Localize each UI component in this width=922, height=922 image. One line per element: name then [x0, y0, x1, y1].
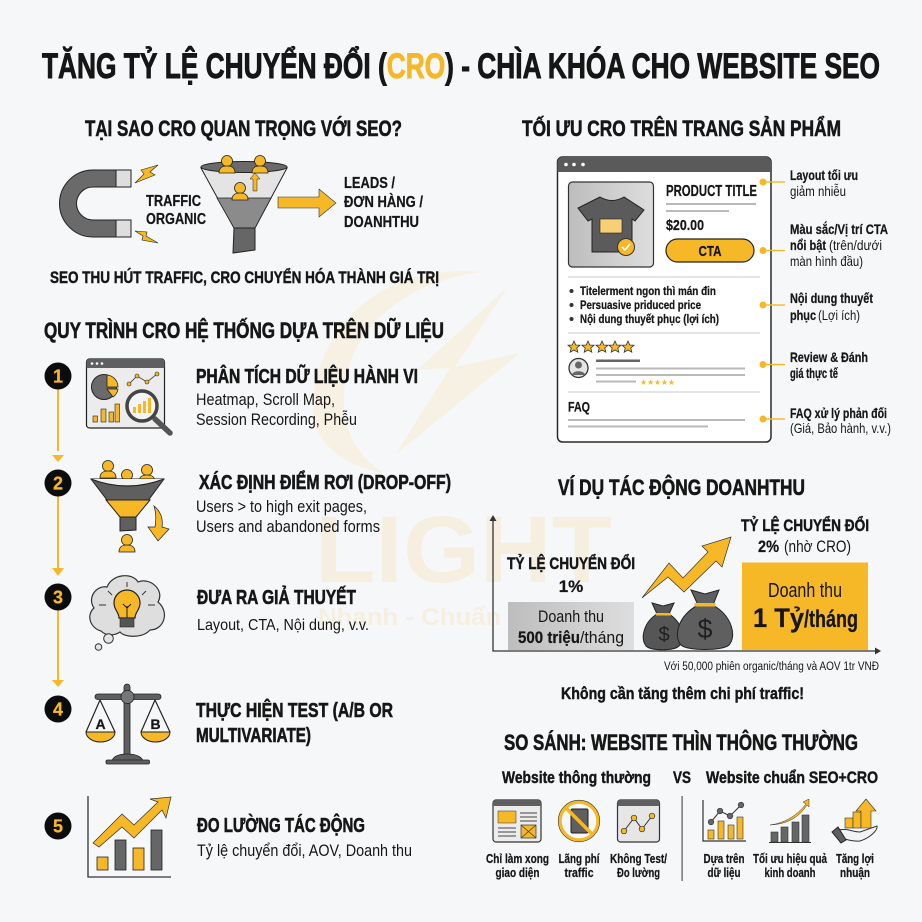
panel: product page mockup: PRODUCT TITLE	[666, 183, 757, 200]
bar: before CRO: Doanh thu	[538, 607, 604, 626]
step 5 number	[44, 812, 72, 840]
label: data driven	[704, 851, 745, 880]
label: no test: Không Test/	[610, 851, 667, 866]
step 4 number: 4	[53, 700, 63, 720]
comparison headers: Website chuẩn SEO+CRO	[706, 768, 878, 787]
persuasive bullets	[570, 284, 719, 326]
label: traffic organic	[146, 193, 206, 228]
icon: money bags	[643, 590, 733, 650]
callout: content: Nội dung thuyết	[790, 290, 873, 306]
callout: layout: Layout tối ưu	[790, 167, 858, 183]
label: leads, orders, revenue	[344, 175, 423, 231]
label: no test	[610, 851, 667, 880]
callout connectors	[760, 178, 785, 422]
icon: money bags: $	[658, 624, 670, 646]
label: 1 percent: TỶ LỆ CHUYỂN ĐỔI	[507, 554, 635, 573]
bar: after CRO: /tháng	[804, 606, 858, 633]
icon: data chart	[703, 800, 746, 841]
comparison headers: VS	[673, 768, 691, 787]
callout: CTA: (trên/dưới	[829, 237, 882, 253]
review block: ★★★★★	[640, 378, 675, 387]
step 3 number: 3	[53, 588, 63, 608]
icon: A/B scales: B	[150, 716, 161, 732]
caption: no extra traffic cost: Không cần tăng thêm chi phí traffic!	[561, 684, 804, 703]
comparison headers	[502, 768, 878, 787]
label: optimise business: kinh doanh	[764, 865, 816, 880]
icon: business optimisation bars	[769, 799, 811, 843]
icon: t-shirt product image	[568, 182, 654, 267]
bar: after CRO	[742, 562, 868, 650]
label: leads, orders, revenue: LEADS /	[344, 175, 395, 192]
watermark: LIGHT logo: Nhanh - Chuẩn - Đúng	[318, 604, 590, 631]
label: increase profit	[836, 851, 874, 880]
text: step 3	[197, 586, 369, 634]
icon: A/B scales: A	[95, 716, 106, 732]
label: 2 percent: 2%	[758, 537, 779, 556]
step 1 number: 1	[53, 366, 63, 386]
text: step 2	[196, 471, 451, 536]
text: step 2: XÁC ĐỊNH ĐIỂM RƠI (DROP-OFF)	[199, 471, 451, 494]
step 5 number: 5	[53, 816, 63, 836]
icon: plain layout window	[493, 800, 541, 842]
icon: magnet	[68, 165, 158, 243]
arrow: growth	[642, 537, 731, 598]
icon: conversion funnel	[201, 156, 287, 253]
icon: drop-off funnel	[91, 460, 169, 552]
bar: before CRO: /tháng	[580, 628, 624, 647]
text: step 2: Users and abandoned forms	[196, 517, 380, 536]
step 3 number	[44, 584, 72, 610]
label: just finished UI: giao diện	[496, 865, 540, 880]
heading: product page: TỐI ƯU CRO TRÊN TRANG SẢN PHẨM	[522, 115, 841, 141]
icon: traffic wasted	[558, 800, 600, 842]
label: leads, orders, revenue: ĐƠN HÀNG /	[344, 192, 423, 211]
icon: hand with rising profit	[832, 799, 877, 843]
text: step 1: Session Recording, Phễu	[196, 410, 357, 429]
text: step 5: Tỷ lệ chuyển đổi, AOV, Doanh thu	[197, 841, 412, 860]
persuasive bullets: Persuasive priduced price	[580, 298, 701, 312]
text: step 4: MULTIVARIATE)	[196, 725, 311, 747]
panel: product page mockup: FAQ	[568, 398, 590, 414]
comparison headers: Website thông thường	[502, 768, 651, 787]
callout: content	[790, 290, 873, 323]
label: traffic organic: ORGANIC	[146, 211, 206, 228]
text: step 3: Layout, CTA, Nội dung, v.v.	[197, 617, 369, 634]
callout: FAQ: (Giá, Bảo hành, v.v.)	[790, 420, 891, 436]
step 4 number	[44, 696, 72, 722]
label: just finished UI: Chỉ làm xong	[486, 851, 549, 866]
step 2 number: 2	[53, 474, 63, 494]
bar: before CRO	[508, 602, 634, 650]
callout: layout: giảm nhiễu	[790, 183, 846, 199]
callout: review	[790, 349, 868, 381]
step 1 number	[44, 362, 72, 390]
text: step 2: Users > to high exit pages,	[196, 497, 367, 516]
bar: after CRO: Doanh thu	[768, 580, 842, 602]
text: step 1: Heatmap, Scroll Map,	[196, 390, 335, 409]
arrows: step connectors	[52, 385, 64, 687]
watermark: LIGHT logo	[313, 271, 612, 631]
label: wasted traffic: Lãng phí	[558, 851, 600, 866]
label: no test: Đo lường	[617, 865, 660, 880]
footnote: assumptions: Với 50,000 phiên organic/tháng và AOV 1tr VNĐ	[664, 661, 879, 673]
heading: why CRO matters: TẠI SAO CRO QUAN TRỌNG VỚI SEO?	[85, 116, 402, 141]
chart: revenue impact	[490, 515, 881, 654]
watermark: LIGHT logo: LIGHT	[315, 497, 612, 603]
review block	[568, 341, 745, 387]
text: step 4: THỰC HIỆN TEST (A/B OR	[196, 698, 393, 722]
callout: review: giá thực tế	[790, 365, 838, 381]
caption: SEO and CRO: SEO THU HÚT TRAFFIC, CRO CHUYỂN HÓA THÀNH GIÁ TRỊ	[50, 268, 439, 287]
label: 1 percent	[507, 554, 635, 596]
label: leads, orders, revenue: DOANHTHU	[344, 214, 419, 231]
label: increase profit: Tăng lợi	[836, 851, 874, 866]
label: 2 percent	[741, 516, 869, 556]
callout: CTA: màn hình đầu)	[790, 253, 863, 269]
label: data driven: Dựa trên	[704, 851, 745, 866]
label: optimise business	[753, 851, 828, 880]
bar: after CRO: 1 Tỷ	[753, 603, 804, 633]
icon: money bags: $	[697, 614, 713, 644]
text: step 5	[197, 813, 412, 860]
bar: before CRO: 500 triệu	[518, 628, 580, 647]
icon: analytics window with magnifier	[86, 359, 170, 433]
icon: no testing window	[618, 800, 660, 842]
CTA button	[666, 239, 754, 262]
axes	[490, 515, 881, 654]
text: step 5: ĐO LƯỜNG TÁC ĐỘNG	[197, 813, 365, 837]
label: wasted traffic	[558, 851, 600, 880]
label: data driven: dữ liệu	[708, 865, 741, 880]
icon: growth chart	[88, 796, 171, 877]
callout: content: (Lợi ích)	[818, 307, 860, 323]
callout: content: phục	[790, 307, 816, 323]
callout: FAQ	[790, 405, 891, 436]
callout: FAQ: FAQ xử lý phản đối	[790, 405, 887, 421]
persuasive bullets: Titelerment ngon thì mán đin	[580, 284, 716, 298]
label: 1 percent: 1%	[559, 577, 583, 596]
callout: CTA: nổi bật	[790, 237, 826, 253]
icon: idea thought cloud	[90, 576, 164, 650]
arrow: funnel to results	[278, 189, 336, 217]
label: 2 percent: TỶ LỆ CHUYỂN ĐỔI	[741, 516, 869, 535]
text: step 1: PHÂN TÍCH DỮ LIỆU HÀNH VI	[196, 364, 418, 388]
callout: CTA: Màu sắc/Vị trí CTA	[790, 220, 888, 237]
label: wasted traffic: traffic	[564, 865, 594, 880]
callout: review: Review & Đánh	[790, 349, 868, 365]
label: optimise business: Tối ưu hiệu quả	[753, 851, 828, 866]
icon: A/B scales	[86, 684, 170, 764]
label: traffic organic: TRAFFIC	[146, 193, 201, 210]
label: increase profit: nhuận	[840, 865, 870, 880]
label: just finished UI	[486, 851, 549, 880]
callout: layout	[790, 167, 858, 199]
step 2 number	[44, 470, 72, 496]
callout: CTA	[790, 220, 888, 269]
panel: product page mockup	[558, 157, 771, 442]
heading: CRO process: QUY TRÌNH CRO HỆ THỐNG DỰA TRÊN DỮ LIỆU	[44, 317, 444, 343]
text: step 4	[196, 698, 393, 747]
text: step 3: ĐƯA RA GIẢ THUYẾT	[197, 586, 356, 609]
persuasive bullets: Nội dung thuyết phục (lợi ích)	[580, 312, 719, 326]
heading: revenue impact: VÍ DỤ TÁC ĐỘNG DOANHTHU	[558, 475, 805, 500]
label: 2 percent: (nhờ CRO)	[784, 537, 851, 556]
panel: product page mockup: $20.00	[666, 217, 704, 234]
CTA button: CTA	[698, 243, 722, 260]
text: step 1	[196, 364, 418, 429]
